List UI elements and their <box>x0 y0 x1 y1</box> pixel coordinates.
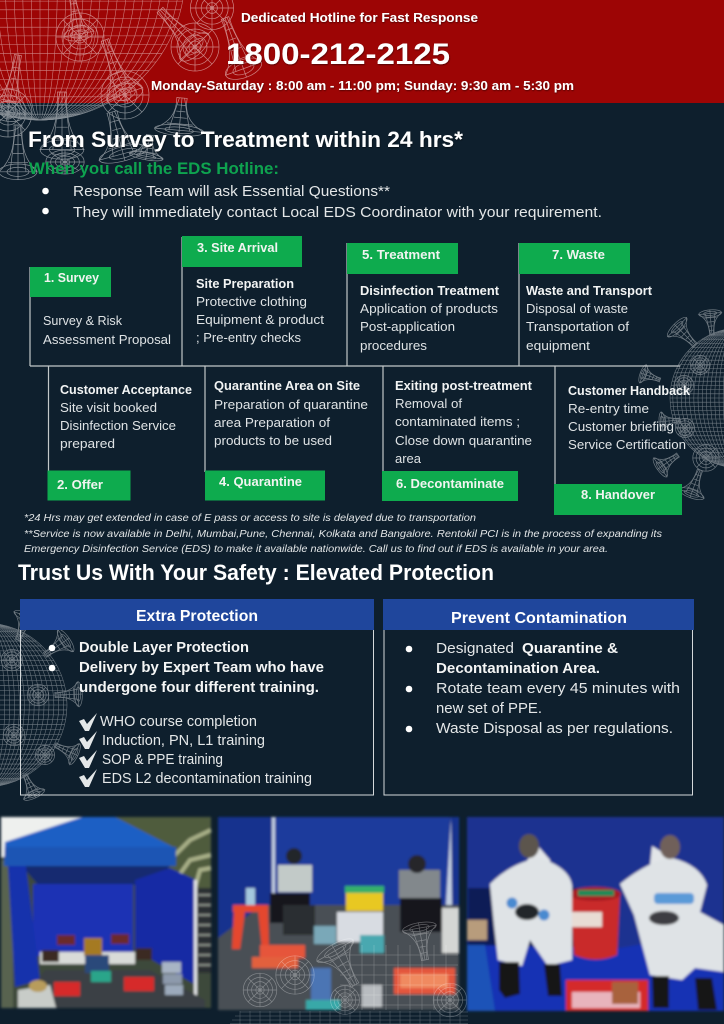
step 1: survey: Survey & Risk <box>43 313 122 328</box>
step 8: handover <box>554 383 691 515</box>
section heading: survey to treatment: From Survey to Treatment within 24 hrs* <box>28 127 463 152</box>
step 6: decontaminate: Close down quarantine <box>395 433 532 448</box>
step 1: survey: 1. Survey <box>44 271 99 285</box>
step 2: offer: prepared <box>60 436 115 451</box>
step 5: treatment: Application of products <box>360 301 499 316</box>
step 6: decontaminate: 6. Decontaminate <box>396 477 504 491</box>
panel: extra protection: undergone four different training. <box>79 679 319 696</box>
step 3: site arrival <box>182 236 324 345</box>
step 4: quarantine: Preparation of quarantine <box>214 397 368 412</box>
step 8: handover: Re-entry time <box>568 401 649 416</box>
step 4: quarantine <box>205 378 368 500</box>
hotline number: 1800-212-2125 <box>226 38 450 71</box>
person in suit, left <box>490 834 572 998</box>
step 4: quarantine: 4. Quarantine <box>219 475 302 489</box>
panel: extra protection: EDS L2 decontamination training <box>102 770 312 787</box>
step 7: waste: equipment <box>526 338 590 353</box>
step 7: waste: 7. Waste <box>552 248 605 262</box>
virus illustration: right <box>637 309 724 502</box>
step 2: offer: Customer Acceptance <box>60 382 192 397</box>
panel: extra protection: WHO course completion <box>100 713 257 730</box>
virus illustration: top left <box>0 0 264 180</box>
step 8: handover: Customer Handback <box>568 383 691 398</box>
red barrel <box>569 887 621 960</box>
header band <box>0 0 724 103</box>
panel: extra protection: Induction, PN, L1 training <box>102 732 265 749</box>
virus overlay on photo <box>230 920 468 1024</box>
step 6: decontaminate: Removal of <box>395 396 462 411</box>
step 6: decontaminate: Exiting post-treatment <box>395 378 533 393</box>
panel: prevent contamination: Designated <box>436 640 514 657</box>
step 5: treatment <box>347 243 500 353</box>
panel: prevent contamination: Rotate team every 45 minutes with <box>436 680 680 697</box>
photo: quarantine tent <box>1 817 211 1008</box>
step 6: decontaminate: contaminated items ; <box>395 414 520 429</box>
step 4: quarantine: Quarantine Area on Site <box>214 378 360 393</box>
step 5: treatment: Post-application <box>360 319 455 334</box>
step 2: offer: 2. Offer <box>57 478 103 492</box>
footnotes: *24 Hrs may get extended in case of E pass or access to site is delayed due to transportation <box>24 512 476 524</box>
step 5: treatment: procedures <box>360 338 428 353</box>
step 3: site arrival: ; Pre-entry checks <box>196 330 301 345</box>
hotline bullet list: They will immediately contact Local EDS Coordinator with your requirement. <box>73 204 602 221</box>
hotline bullet list: Response Team will ask Essential Questions** <box>73 183 390 200</box>
panel: prevent contamination <box>383 599 694 795</box>
step 4: quarantine: products to be used <box>214 433 332 448</box>
person one <box>270 848 315 935</box>
red stool <box>232 905 269 949</box>
step 5: treatment: Disinfection Treatment <box>360 283 500 298</box>
step 7: waste: Waste and Transport <box>526 283 653 298</box>
red tray <box>566 980 648 1011</box>
hotline bullet list <box>42 183 602 221</box>
step 8: handover: Service Certification <box>568 437 686 452</box>
step 5: treatment: 5. Treatment <box>362 248 441 262</box>
panel: prevent contamination: Decontamination Area. <box>436 660 600 677</box>
panel: prevent contamination: Prevent Contamination <box>451 610 627 627</box>
footnotes <box>24 512 663 555</box>
step 3: site arrival: Protective clothing <box>196 294 307 309</box>
panel: prevent contamination: new set of PPE. <box>436 700 542 717</box>
step 6: decontaminate <box>382 378 533 501</box>
virus illustration: left <box>0 608 83 803</box>
step 1: survey: Assessment Proposal <box>43 332 171 347</box>
opening hours: Monday-Saturday : 8:00 am - 11:00 pm; Sunday: 9:30 am - 5:30 pm <box>151 78 574 93</box>
step 2: offer: Site visit booked <box>60 400 157 415</box>
step 2: offer: Disinfection Service <box>60 418 176 433</box>
subheading: When you call the EDS Hotline: <box>29 159 279 178</box>
step 7: waste: Transportation of <box>526 319 629 334</box>
panel: prevent contamination: Quarantine & <box>522 640 618 657</box>
step 3: site arrival: Equipment & product <box>196 312 324 327</box>
hotline caption: Dedicated Hotline for Fast Response <box>241 10 478 25</box>
step 7: waste <box>519 243 653 353</box>
step 3: site arrival: 3. Site Arrival <box>197 241 278 255</box>
step 7: waste: Disposal of waste <box>526 301 628 316</box>
photo: team in protective suits <box>467 817 724 1011</box>
step 8: handover: Customer briefing <box>568 419 674 434</box>
person two <box>399 855 442 932</box>
step 8: handover: 8. Handover <box>581 488 655 502</box>
step 2: offer <box>48 382 192 500</box>
panel: prevent contamination: Waste Disposal as per regulations. <box>436 720 673 737</box>
process timeline <box>30 236 691 515</box>
footnotes: **Service is now available in Delhi, Mumbai,Pune, Chennai, Kolkata and Bangalore. Rentokil PCI is in the process of expanding its <box>24 528 663 540</box>
panel: extra protection <box>20 599 374 795</box>
step 1: survey <box>30 267 171 347</box>
panel: extra protection: Extra Protection <box>136 608 258 625</box>
panel: extra protection: Double Layer Protection <box>79 639 249 656</box>
step 4: quarantine: area Preparation of <box>214 415 330 430</box>
step 6: decontaminate: area <box>395 451 422 466</box>
hotline heading <box>151 10 574 93</box>
photo: quarantine area with two people <box>218 817 459 1010</box>
step 3: site arrival: Site Preparation <box>196 276 294 291</box>
icon: check marks <box>79 713 97 787</box>
footnotes: Emergency Disinfection Service (EDS) to make it available nationwide. Call us to find out if EDS is available in your area. <box>24 543 608 555</box>
panel: extra protection: Delivery by Expert Team who have <box>79 659 324 676</box>
section heading: elevated protection: Trust Us With Your Safety : Elevated Protection <box>18 560 494 585</box>
person in suit, right <box>620 835 724 1010</box>
panel: extra protection: SOP & PPE training <box>102 751 223 768</box>
